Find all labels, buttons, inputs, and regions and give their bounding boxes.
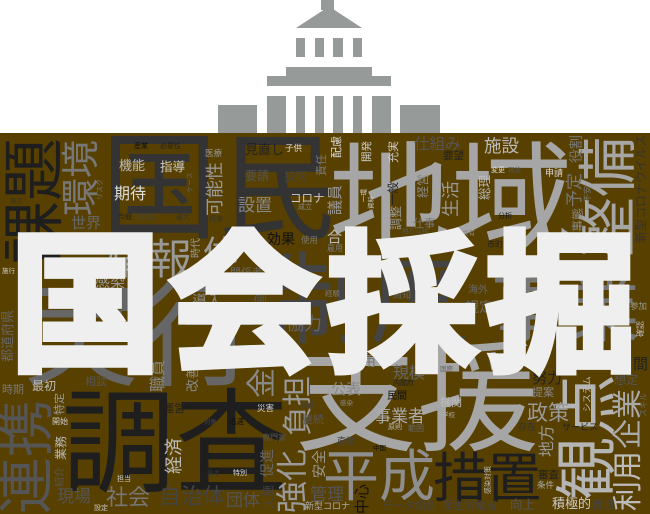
small words: lower right: 厚生労働省 <box>442 498 497 512</box>
small words: lower right: 範囲 <box>408 423 424 433</box>
small words: top left: ケース <box>186 172 194 193</box>
small words: top left: 責任 <box>314 154 328 176</box>
small words: lower right: 提案 <box>532 386 554 399</box>
small words: top right: 申請 <box>545 167 563 178</box>
small words: lower right: 周知 <box>393 289 411 300</box>
small words: left and lower left: 相談 <box>85 375 107 388</box>
word: 地域: 地域 <box>329 134 573 270</box>
small words: top left: 指導 <box>160 159 186 174</box>
small words: lower right: 条件 <box>537 480 555 490</box>
small words: left and lower left: 施行 <box>2 266 16 275</box>
small words: top right: 現状 <box>508 165 522 174</box>
small words: top right: 仕事 <box>413 217 435 230</box>
small words: top left: 見直し <box>245 142 284 157</box>
small words: top left: 最大 <box>176 212 190 221</box>
small words: left and lower left: 開始 <box>52 416 68 426</box>
small words: top left: 今般 <box>118 212 132 221</box>
small words: left and lower left: 紹介 <box>53 467 66 487</box>
small words: top right: 変更 <box>491 165 505 174</box>
small words: top right: 仕組み <box>414 135 461 153</box>
small words: top left: 体 <box>203 235 238 274</box>
small words: lower right: システム <box>582 376 592 412</box>
small words: lower right: 直接 <box>337 435 355 446</box>
small words: top right: 一般 <box>387 182 400 205</box>
small words: lower right: 感染 <box>340 398 354 407</box>
small words: lower right: 機関 <box>440 396 462 409</box>
small words: left and lower left: 促進 <box>259 449 275 477</box>
small words: top left: 現時点 <box>136 213 157 221</box>
word: 実行: 実行 <box>22 270 258 402</box>
small words: top left: 成立 <box>298 202 312 211</box>
word: 課題: 課題 <box>0 138 70 264</box>
small words: lower right: データ個別 <box>382 498 437 512</box>
small words: top right: 分析 <box>498 211 512 220</box>
small words: left and lower left: 職員 <box>149 360 167 392</box>
word: 整備: 整備 <box>575 137 642 257</box>
small words: top right: 予定 <box>565 173 584 207</box>
word: 協力: 協力 <box>286 314 322 334</box>
small words: top left: 必要性 <box>160 141 181 150</box>
small words: left and lower left: 専門家 <box>262 432 286 442</box>
icon: Diet building <box>218 0 440 133</box>
small words: top left <box>10 141 328 274</box>
small words: lower right: 想定 <box>614 372 638 387</box>
small words: top left: 機能 <box>119 158 145 173</box>
small words: lower right: 存在 <box>518 421 536 432</box>
word: 政策: 政策 <box>527 402 569 425</box>
small words: top right: 共有 <box>462 228 476 237</box>
small words: top left: 東京 <box>10 196 24 205</box>
small words: lower right: 経験 <box>325 288 340 298</box>
small words: top left: 世界 <box>71 215 101 232</box>
word: 制度 (behind title): 制度 <box>270 245 470 357</box>
small words: lower right: 間 <box>633 356 648 373</box>
small words: top right <box>326 135 648 253</box>
word: 利用: 利用 <box>612 451 645 511</box>
word: 負担: 負担 <box>282 376 315 436</box>
small words: lower right: 内閣府 <box>393 378 414 387</box>
small words: top left: 効果 <box>267 231 295 247</box>
small words: left and lower left: 実施 <box>261 485 275 509</box>
small words: left and lower left <box>0 266 350 512</box>
panel: word cloud <box>0 123 650 514</box>
small words: top right: 新型コロナウイルス <box>634 135 648 243</box>
word: 措置: 措置 <box>433 449 541 509</box>
small words: lower right: 確認 <box>635 321 645 337</box>
small words: top right: 雇用 <box>327 244 343 253</box>
small words: lower right: 原則 <box>388 422 402 431</box>
small words: left and lower left: 経済 <box>164 438 184 474</box>
small words: top left: 時代 <box>190 238 202 258</box>
small words: left and lower left: 改善 <box>185 366 200 392</box>
small words: lower right: 中国 <box>373 443 386 452</box>
small words: lower right <box>325 283 648 514</box>
small words: left and lower left: 対象 <box>204 417 218 426</box>
small words: left and lower left: 業務 <box>54 436 68 460</box>
small words: left and lower left: 特定 <box>52 393 66 415</box>
small words: top left: リスク <box>96 179 104 200</box>
small words: top right: 一環 <box>360 188 368 202</box>
small words: top left: 医療 <box>205 148 223 158</box>
small words: top right: 地方公共 <box>402 226 428 235</box>
small words: left and lower left: 最初 <box>32 379 56 393</box>
small words: lower right: 参加 <box>630 301 647 311</box>
small words: left and lower left: 都道府県 <box>0 310 15 362</box>
word: 環境: 環境 <box>61 140 103 216</box>
small words: lower right: 公表 <box>331 381 361 398</box>
small words: left and lower left: 運営 <box>163 401 185 415</box>
word: 事業 (behind title): 事業 <box>490 267 640 351</box>
small words: left and lower left: 側 <box>253 293 267 309</box>
word: 金額: 金 <box>246 368 279 398</box>
word: 国民: 国民 <box>101 123 335 254</box>
small words: top left: 将来 <box>209 214 223 223</box>
small words: lower right: 地方 <box>538 425 556 457</box>
small words: top right: 不安 <box>583 186 592 202</box>
word: 自治体: 自治体 <box>159 484 225 509</box>
small words: lower right: 審査 <box>538 468 559 481</box>
small words: left and lower left: 担当 <box>117 474 131 483</box>
small words: left and lower left: 導入 <box>192 293 222 310</box>
small words: left and lower left: 特別 <box>233 468 247 477</box>
small words: lower right: 海外 <box>468 283 488 296</box>
small words: lower right: 規模 <box>393 364 425 382</box>
word: 平成: 平成 <box>323 445 435 508</box>
small words: lower right: 向上 <box>510 497 535 512</box>
word: 社会: 社会 <box>106 485 150 510</box>
small words: top right: 調整 <box>389 206 403 230</box>
word: 支援: 支援 <box>295 331 539 467</box>
small words: left and lower left: 迅速 <box>229 417 244 426</box>
small words: left and lower left: 時期 <box>2 383 24 396</box>
small words: left and lower left: 関係者 <box>230 266 263 279</box>
word: 情報: 情報 <box>108 236 192 283</box>
small words: top left: 技術 <box>284 169 307 183</box>
word: 期待: 期待 <box>114 185 146 203</box>
small words: top left: コロナ <box>290 192 324 205</box>
small words: lower right: 中心 <box>354 484 371 514</box>
small words: top left: 産業 <box>134 141 148 150</box>
word: 現場: 現場 <box>57 487 91 506</box>
small words: top right: 生活 <box>441 181 461 217</box>
small words: top right: 開発 <box>360 141 373 162</box>
word: 設置: 設置 <box>238 196 272 215</box>
small words: lower right: 普通 <box>592 497 614 511</box>
small words: left and lower left: 継続 <box>302 412 324 426</box>
title: 国会採掘 <box>9 221 643 392</box>
small words: left and lower left: 基本 <box>207 468 220 477</box>
small words: top right: 市町 <box>487 239 503 249</box>
small words: top right: 経営 <box>416 174 430 198</box>
word: 観点: 観点 <box>553 374 623 500</box>
small words: top right: 議員 <box>326 185 344 215</box>
small words: top right: 充実 <box>387 141 400 163</box>
word: 事業者: 事業者 <box>374 407 425 426</box>
small words: top right: 資料 <box>366 196 375 209</box>
small words: lower right: 民間 <box>387 390 407 402</box>
small words: lower right: 積極的 <box>552 496 591 511</box>
small words: lower right: 国際 <box>440 364 454 373</box>
small words: top right: 総理 <box>477 174 492 200</box>
word: 調査: 調査 <box>62 381 288 507</box>
word: 企業: 企業 <box>612 389 645 449</box>
small words: left and lower left: 感染 <box>95 274 125 291</box>
word: 団体: 団体 <box>226 491 260 510</box>
small words: top right: 役割 <box>568 135 584 163</box>
small words: top left: 要請 <box>245 169 269 183</box>
small words: lower right: スキル <box>639 393 648 417</box>
small words: left and lower left: 事情 <box>300 400 315 410</box>
small words: top right: 合 <box>327 229 342 246</box>
small words: left and lower left: 災害 <box>257 403 275 413</box>
word: 強化: 強化 <box>274 449 310 513</box>
small words: top right: 事態 <box>571 208 585 232</box>
small words: left and lower left: 新型コロナ <box>305 501 350 511</box>
small words: lower right: 努力 <box>532 370 562 387</box>
small words: top right: 要望 <box>443 150 464 162</box>
small words: top left: 子供 <box>285 143 303 153</box>
small words: left and lower left: 安全 <box>311 450 327 478</box>
word: 施設: 施設 <box>484 136 519 156</box>
small words: lower right: 用 <box>362 353 376 369</box>
small words: lower right: 規定 <box>465 299 493 315</box>
small words: lower right: サービス <box>562 422 598 432</box>
small words: lower right: 感染対策 <box>483 466 492 494</box>
small words: top right: 配慮 <box>329 136 343 158</box>
word: 可能性: 可能性 <box>205 162 225 216</box>
small words: left and lower left: 設定 <box>94 504 108 512</box>
small words: lower right: 学校 <box>442 410 456 419</box>
small words: top left: 使用 <box>301 235 318 245</box>
small words: left and lower left: 管理 <box>310 485 344 504</box>
